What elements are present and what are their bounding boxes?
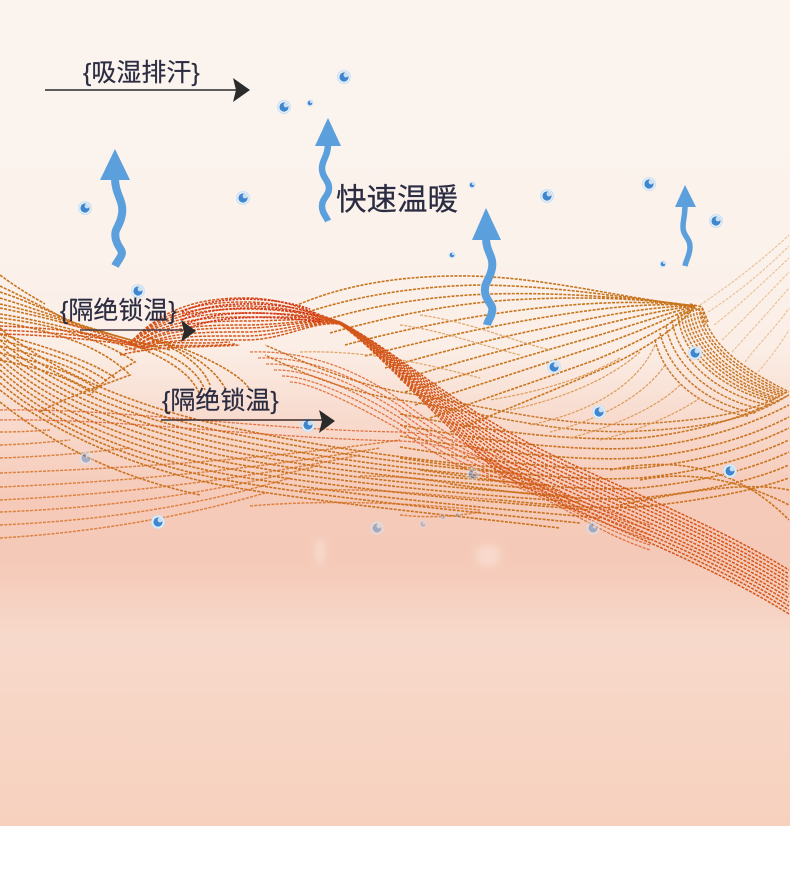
- arrow: insulation lower: [161, 410, 335, 433]
- top arcs converging to peak: [295, 276, 708, 432]
- right edge rising lines: [400, 395, 789, 520]
- water bubbles: [78, 70, 737, 535]
- curl from peak: [265, 308, 789, 432]
- label: fast warming: 快速温暖: [336, 183, 458, 217]
- arrow: insulation upper: [80, 320, 196, 342]
- faint arcs under peak: [490, 345, 700, 440]
- bottom left rising lines: [0, 430, 500, 538]
- red mesh middle: [0, 352, 650, 550]
- arrow: wicking: [45, 78, 250, 102]
- icon: blue wavy arrow 1: [100, 149, 130, 266]
- label: moisture wicking: {吸湿排汗}: [83, 59, 200, 87]
- icon: blue wavy arrow 2: [315, 118, 341, 221]
- wave mesh: [0, 235, 789, 614]
- icon: blue wavy arrow 4: [675, 185, 696, 266]
- hump and strip: [0, 298, 789, 614]
- faint lines behind top arcs: [300, 315, 550, 378]
- hump crimson dots: [182, 299, 322, 330]
- icon: blue wavy arrow 3: [472, 208, 501, 325]
- faint white shapes: [315, 537, 501, 567]
- label: insulation upper: {隔绝锁温}: [60, 297, 177, 325]
- left descending bundle: [0, 275, 600, 528]
- faint fan top right: [700, 235, 789, 372]
- label: insulation lower: {隔绝锁温}: [162, 387, 279, 415]
